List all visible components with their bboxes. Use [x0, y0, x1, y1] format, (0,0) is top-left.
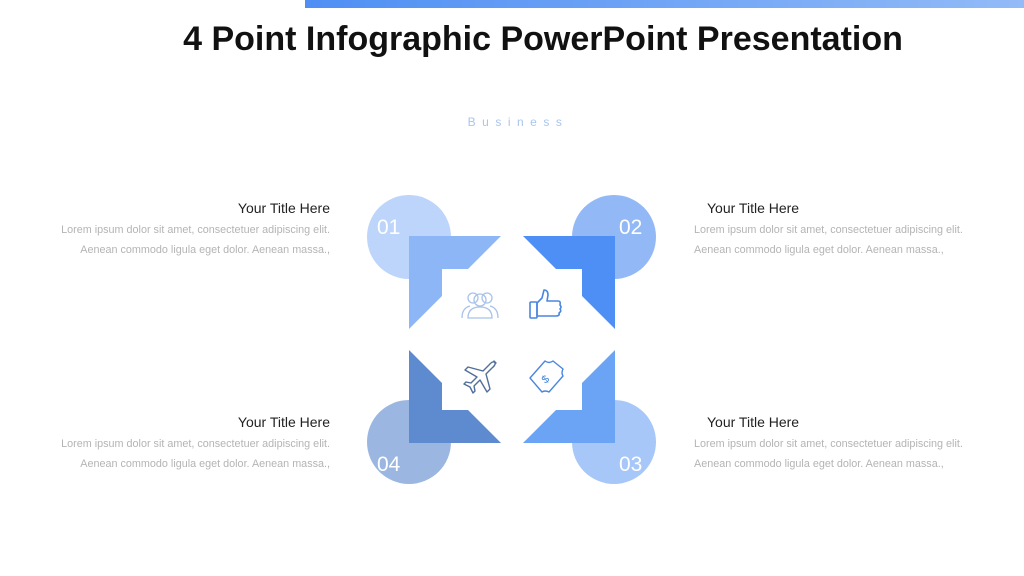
circle 01: [367, 195, 451, 279]
corner shape 1: [409, 236, 501, 329]
circle 01: 01: [377, 216, 400, 239]
text block: top right: Lorem ipsum dolor sit amet, consectetuer adipiscing elit.: [694, 224, 963, 236]
circle 04: 04: [377, 453, 401, 476]
icon: money: [530, 361, 563, 392]
text block: top right: Your Title Here: [707, 200, 799, 216]
icon: thumbs up: [530, 290, 561, 318]
text block: top left: [61, 200, 330, 256]
corner shape 2: [523, 236, 615, 329]
text block: bottom left: [61, 414, 330, 470]
icon: money: $: [540, 373, 552, 386]
text block: bottom right: [694, 414, 963, 470]
corner shape 3: [523, 350, 615, 443]
text block: top right: Aenean commodo ligula eget dolor. Aenean massa.,: [694, 244, 944, 256]
text block: top left: Aenean commodo ligula eget dolor. Aenean massa.,: [80, 244, 330, 256]
text block: bottom left: Your Title Here: [238, 414, 330, 430]
text block: bottom left: Aenean commodo ligula eget dolor. Aenean massa.,: [80, 458, 330, 470]
title: 4 Point Infographic PowerPoint Presentation: [183, 20, 903, 58]
circle 02: 02: [619, 216, 642, 239]
text block: bottom left: Lorem ipsum dolor sit amet, consectetuer adipiscing elit.: [61, 438, 330, 450]
corner shape 4: [409, 350, 501, 443]
text block: top right: [694, 200, 963, 256]
text block: top left: Your Title Here: [238, 200, 330, 216]
circle 04: [367, 400, 451, 484]
text block: top left: Lorem ipsum dolor sit amet, consectetuer adipiscing elit.: [61, 224, 330, 236]
icon: people: [462, 293, 498, 318]
icon: airplane: [464, 361, 496, 393]
circle 03: 03: [619, 453, 642, 476]
text block: bottom right: Aenean commodo ligula eget dolor. Aenean massa.,: [694, 458, 944, 470]
text block: bottom right: Lorem ipsum dolor sit amet, consectetuer adipiscing elit.: [694, 438, 963, 450]
circle 03: [572, 400, 656, 484]
circle 02: [572, 195, 656, 279]
subtitle: Business: [468, 115, 568, 129]
text block: bottom right: Your Title Here: [707, 414, 799, 430]
